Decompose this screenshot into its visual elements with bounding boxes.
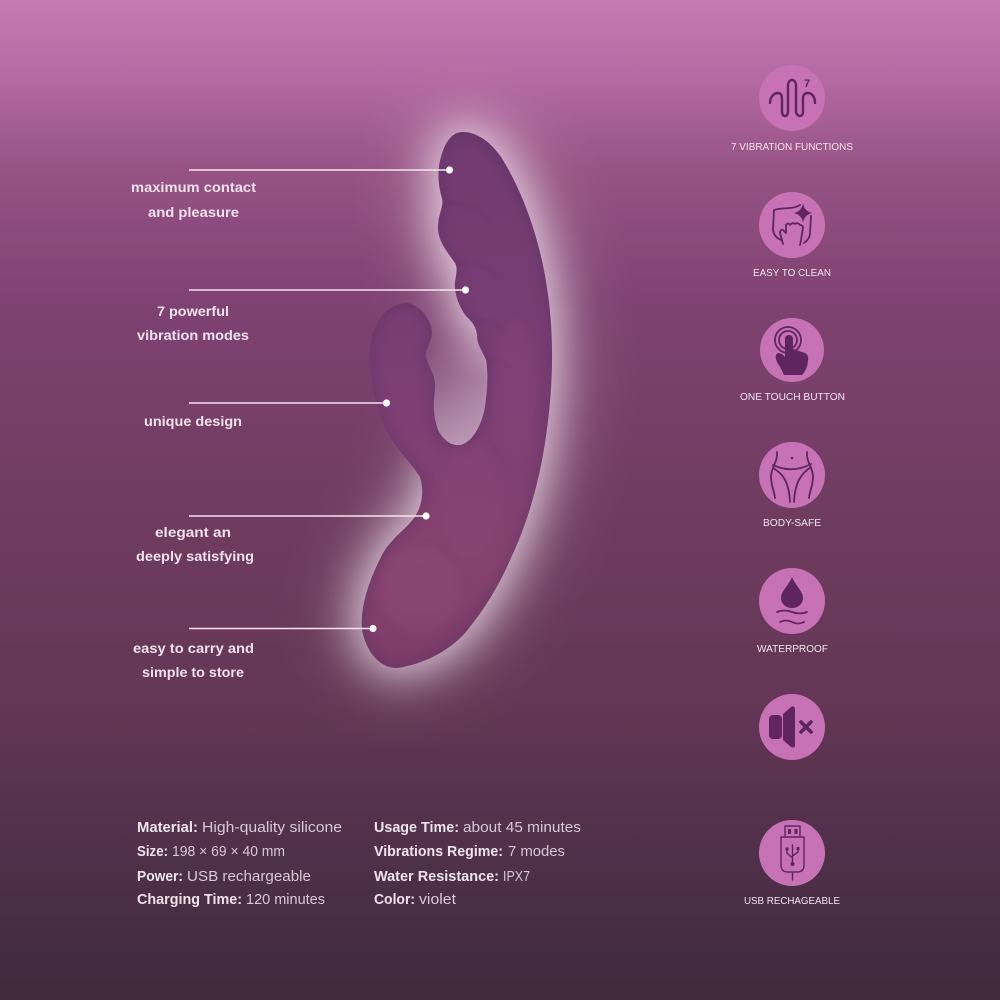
spec list: left column: High-quality silicone: [202, 820, 342, 836]
callout: maximum contact: and pleasure: [148, 204, 239, 220]
callout: maximum contact: [131, 166, 453, 220]
callout: easy to carry: easy to carry and: [133, 640, 254, 656]
spec list: right column: Usage Time:: [374, 820, 459, 836]
icon: one touch button: ONE TOUCH BUTTON: [740, 391, 845, 403]
spec list: left column: Charging Time:: [137, 892, 242, 908]
product glow: near halo: [362, 132, 552, 668]
spec list: right column: [374, 820, 581, 908]
spec list: right column: about 45 minutes: [463, 820, 581, 836]
callout: unique design: unique design: [144, 413, 242, 429]
icon: usb rechargeable: [744, 820, 840, 907]
gap tint between the two arms: [424, 317, 492, 453]
icon: body-safe: BODY-SAFE: [763, 517, 821, 529]
icon: easy to clean: [753, 192, 831, 279]
spec list: left column: Material:: [137, 820, 198, 836]
icon: waterproof: WATERPROOF: [757, 643, 828, 655]
callout: elegant: elegant an: [155, 524, 231, 540]
callout: elegant: [136, 512, 430, 564]
callout: elegant: deeply satisfying: [136, 548, 254, 564]
spec list: right column: 7 modes: [508, 844, 565, 860]
product glow: wide halo: [362, 132, 552, 668]
spec list: left column: USB rechargeable: [187, 869, 311, 885]
icon: 7 vibration functions: [731, 65, 853, 153]
spec list: left column: Power:: [137, 869, 183, 885]
icon: usb rechargeable: USB RECHAGEABLE: [744, 895, 840, 907]
icon: 7 vibration functions: 7: [804, 78, 810, 90]
callout: vibration modes: vibration modes: [137, 327, 249, 343]
callout: vibration modes: [137, 286, 469, 343]
icon: easy to clean: EASY TO CLEAN: [753, 267, 831, 279]
spec list: left column: 120 minutes: [246, 892, 325, 908]
icon: waterproof: [757, 568, 828, 655]
icon: body-safe: [759, 442, 825, 529]
callout: vibration modes: 7 powerful: [157, 303, 229, 319]
product silhouette: [362, 132, 552, 668]
callout: easy to carry: [133, 625, 377, 680]
spec list: left column: Size:: [137, 844, 168, 860]
spec list: right column: Color:: [374, 892, 415, 908]
spec list: right column: Vibrations Regime:: [374, 844, 503, 860]
callout: unique design: [144, 399, 390, 429]
spec list: right column: Water Resistance:: [374, 869, 499, 885]
icon: silent: [759, 694, 825, 760]
icon: 7 vibration functions: 7 VIBRATION FUNCTIONS: [731, 141, 853, 153]
icon: one touch button: [740, 318, 845, 403]
callout: easy to carry: simple to store: [142, 664, 244, 680]
spec list: right column: violet: [419, 892, 456, 908]
spec list: right column: IPX7: [503, 869, 530, 885]
spec list: left column: 198 × 69 × 40 mm: [172, 844, 285, 860]
spec list: left column: [137, 820, 342, 908]
callout: maximum contact: maximum contact: [131, 179, 256, 195]
